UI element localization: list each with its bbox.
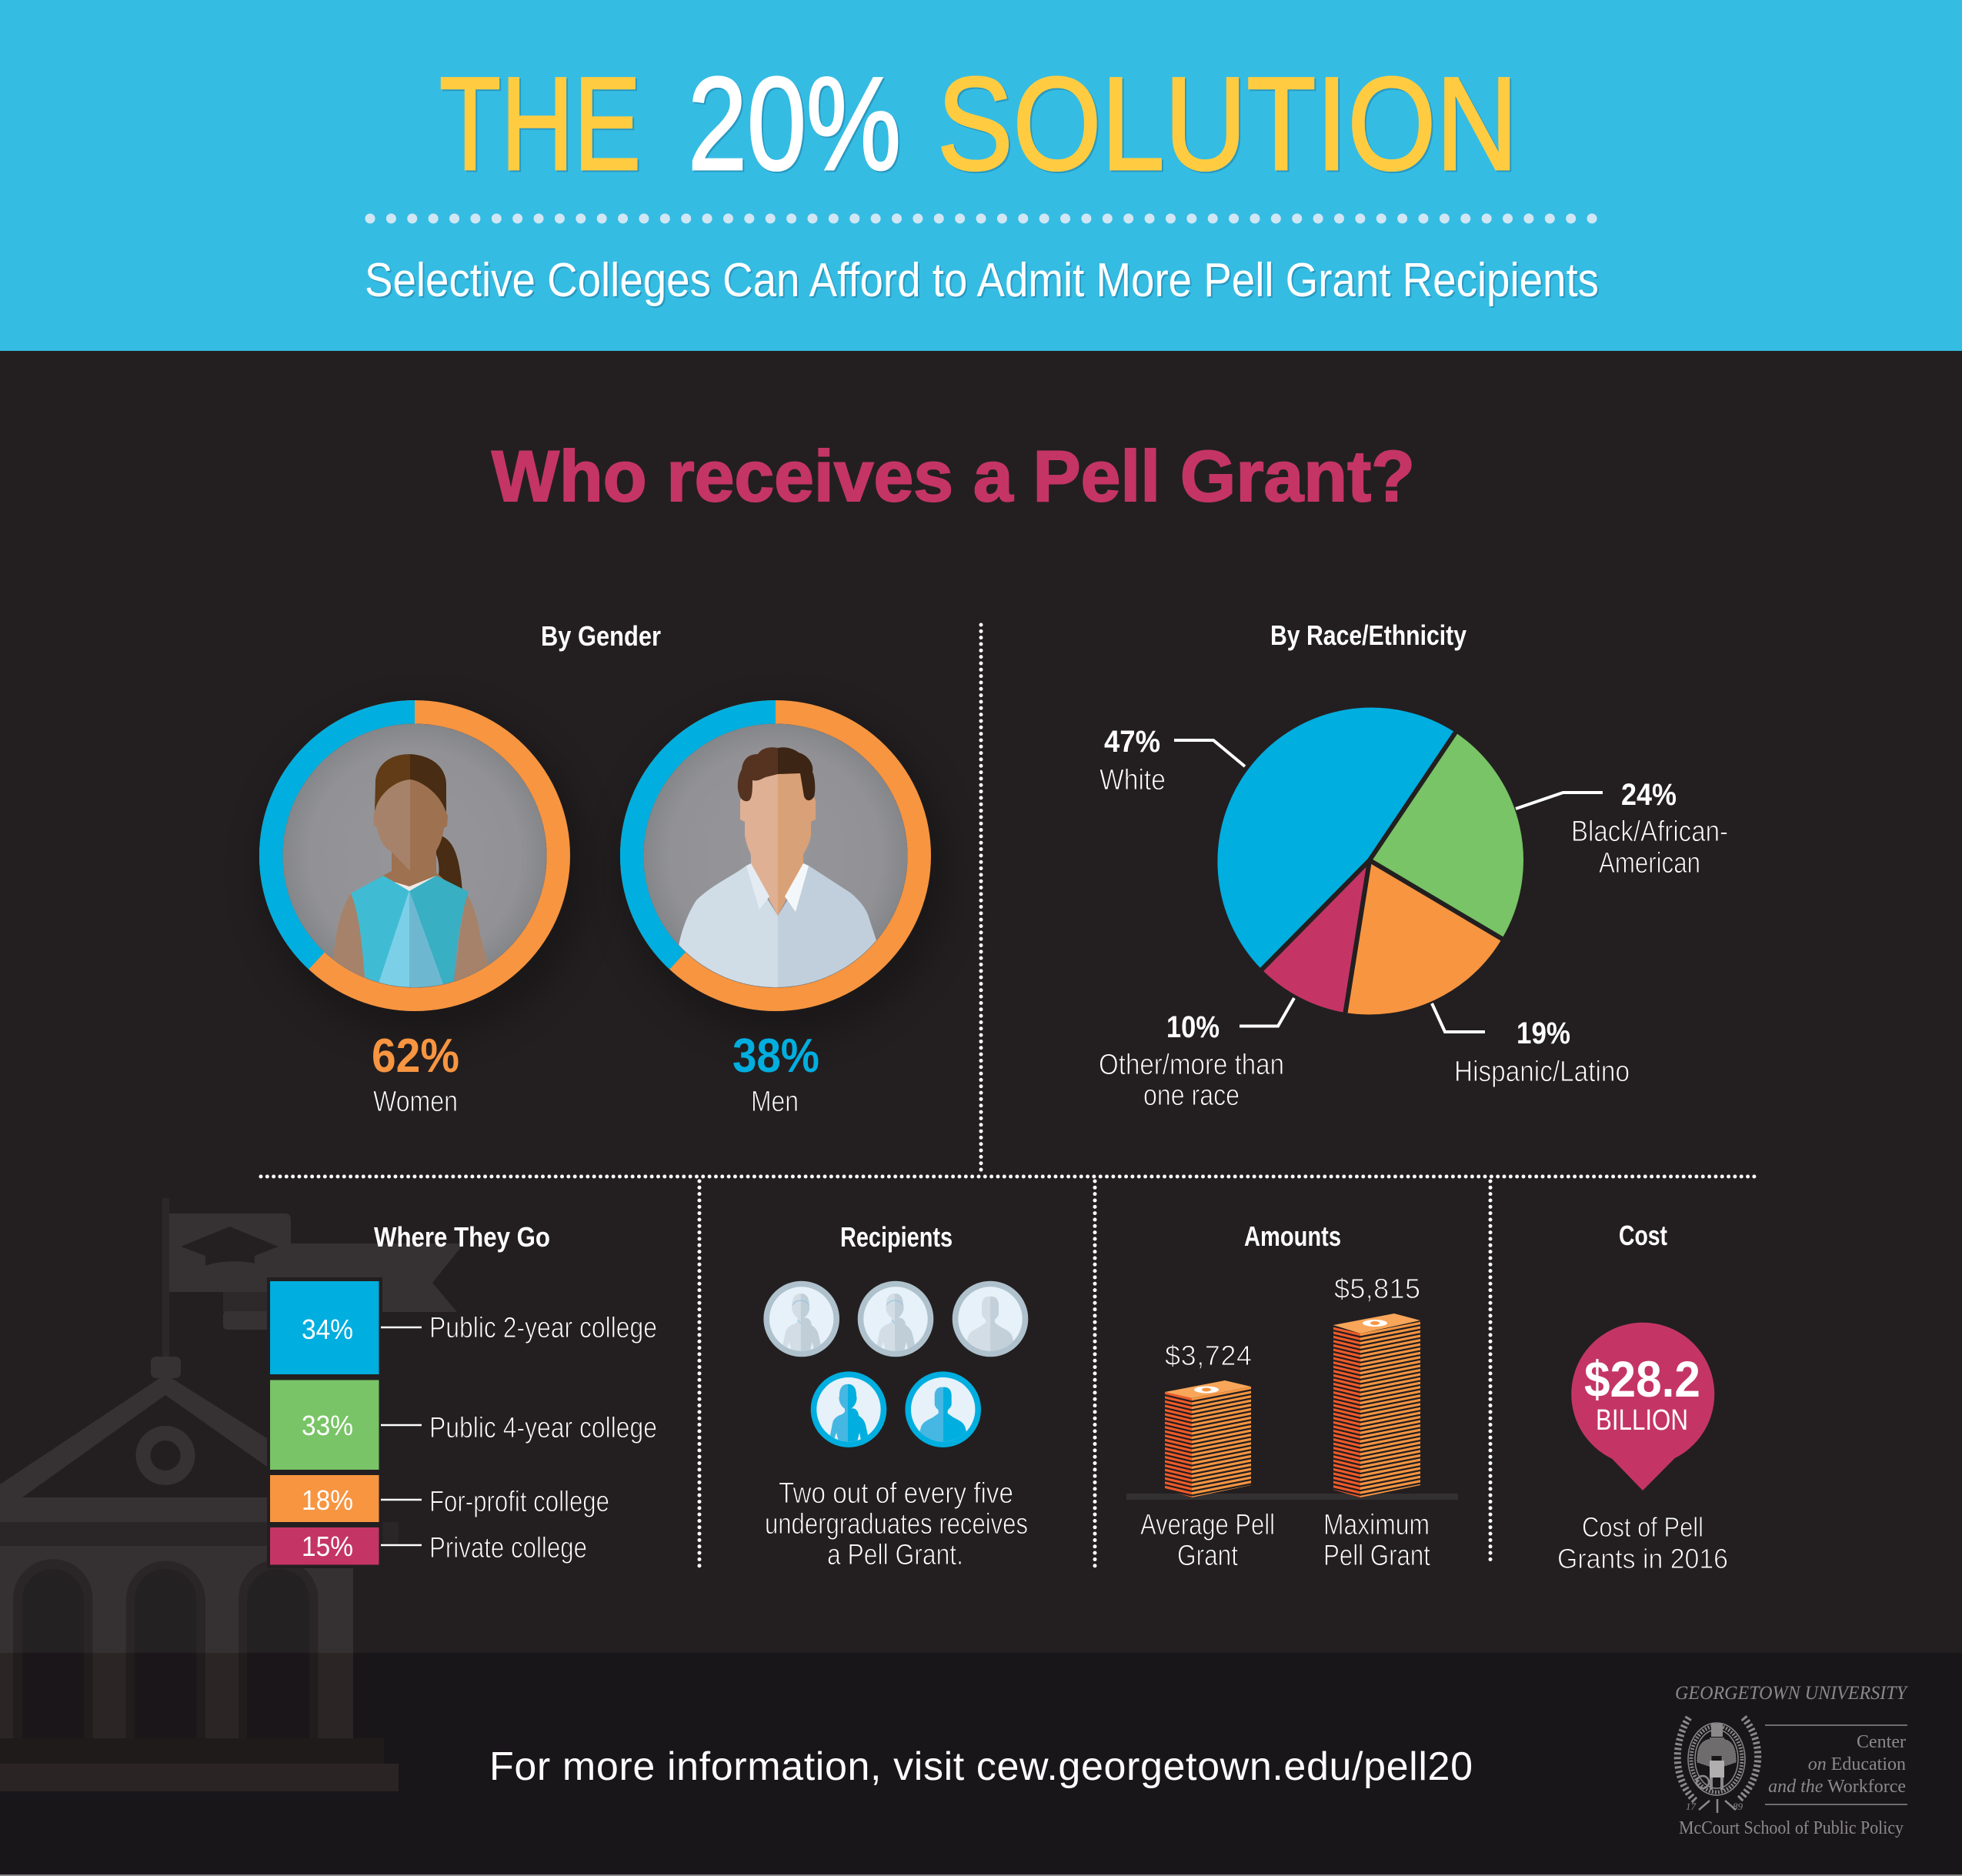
label: black 24% <box>1571 778 1728 880</box>
label: hispanic 19%: 19% <box>1517 1016 1570 1050</box>
label: maximum pell grant <box>1323 1509 1430 1572</box>
icon: person man gray <box>956 1283 1025 1354</box>
center name: Center <box>1857 1732 1906 1752</box>
title: THE <box>439 50 641 198</box>
panel: cost <box>1557 1220 1728 1574</box>
stacked bar: 15% <box>302 1531 353 1562</box>
caption: two out of five: Two out of every five <box>779 1477 1013 1510</box>
stacked bar backing <box>267 1277 382 1568</box>
figure: man <box>677 747 877 993</box>
caption: cost of pell grants: Grants in 2016 <box>1557 1543 1728 1574</box>
pin badge <box>1571 1323 1714 1490</box>
stat: 38% men <box>732 1030 819 1118</box>
money stack: maximum <box>1333 1314 1420 1497</box>
caption: cost of pell grants: Cost of Pell <box>1582 1511 1703 1543</box>
heading: where they go: Where They Go <box>374 1221 550 1253</box>
icon: person woman gray <box>860 1283 931 1354</box>
caption: two out of five <box>765 1477 1028 1571</box>
bar labels: Public 4-year college <box>429 1412 657 1444</box>
title: SOLUTION <box>937 50 1518 198</box>
heading: by race: By Race/Ethnicity <box>1270 619 1466 651</box>
stacked bar: 34% <box>302 1314 353 1345</box>
stat: 62% women <box>372 1030 459 1118</box>
label: white 47%: 47% <box>1104 725 1160 759</box>
label: black 24%: 24% <box>1621 778 1677 812</box>
caption: two out of five: undergraduates receives <box>765 1508 1028 1541</box>
leader lines <box>381 1327 422 1545</box>
bar labels <box>429 1312 657 1564</box>
stacked bar: 18% <box>302 1484 353 1516</box>
label: white 47%: White <box>1099 764 1166 796</box>
pie chart <box>1215 706 1526 1016</box>
stat: 38% men: Men <box>751 1086 799 1118</box>
label: other 10%: 10% <box>1166 1010 1220 1044</box>
icon: person woman gray <box>766 1283 836 1354</box>
panel: amounts <box>1126 1220 1458 1572</box>
stacked bar: 33% <box>302 1410 353 1441</box>
bar labels: For-profit college <box>429 1486 609 1518</box>
label: other 10%: one race <box>1143 1080 1240 1112</box>
stacked bar <box>270 1281 379 1565</box>
caption: two out of five: a Pell Grant. <box>827 1539 963 1571</box>
logo: georgetown <box>1675 1683 1909 1838</box>
donut: men 38% <box>632 712 919 1000</box>
title: 20% <box>688 50 901 198</box>
center name <box>1765 1725 1907 1804</box>
stat: 62% women: Women <box>373 1086 458 1118</box>
figure: woman <box>332 754 489 993</box>
center name: on Education <box>1808 1754 1906 1774</box>
wordmark: GEORGETOWN UNIVERSITY <box>1675 1683 1909 1704</box>
label: other 10%: Other/more than <box>1099 1049 1284 1081</box>
donut: women 62% <box>271 712 559 1000</box>
label: white 47% <box>1099 725 1166 796</box>
seal <box>1677 1717 1758 1813</box>
pin badge: $28.2 <box>1584 1350 1700 1407</box>
stat: 38% men: 38% <box>732 1030 819 1083</box>
dotted dividers <box>261 625 1760 1567</box>
label: black 24%: Black/African- <box>1571 816 1728 848</box>
panel: by gender <box>271 620 919 1118</box>
label: black 24%: American <box>1599 847 1700 880</box>
footer call to action: For more information, visit cew.georgetown.edu/pell20 <box>489 1744 1473 1789</box>
icon: person man blue <box>908 1374 978 1445</box>
seal: 17 <box>1686 1801 1696 1812</box>
panel: by race/ethnicity <box>1099 619 1728 1112</box>
panel: where they go <box>267 1221 657 1568</box>
seal: 89 <box>1733 1801 1743 1812</box>
label: average pell grant <box>1140 1509 1275 1572</box>
label: average pell grant: Average Pell <box>1140 1509 1275 1541</box>
label: hispanic 19%: Hispanic/Latino <box>1454 1056 1630 1088</box>
section heading: Who receives a Pell Grant? <box>492 436 1415 516</box>
pin badge: BILLION <box>1596 1404 1688 1437</box>
money stack: average <box>1165 1380 1251 1497</box>
footer band <box>0 1653 1962 1876</box>
bar labels: Private college <box>429 1532 587 1564</box>
ground shadow <box>1126 1494 1458 1500</box>
center name: and the Workforce <box>1768 1777 1906 1797</box>
icon: person woman blue <box>814 1374 883 1445</box>
heading: by gender: By Gender <box>541 620 661 652</box>
school name: McCourt School of Public Policy <box>1679 1818 1904 1838</box>
heading: cost: Cost <box>1619 1220 1667 1251</box>
leader lines <box>1174 740 1603 1032</box>
dotted rule <box>370 214 1594 223</box>
title <box>439 50 1518 198</box>
label: maximum pell grant: Maximum <box>1323 1509 1430 1541</box>
subtitle: Selective Colleges Can Afford to Admit More Pell Grant Recipients <box>365 254 1599 307</box>
heading: amounts: Amounts <box>1244 1220 1341 1252</box>
header banner <box>0 0 1962 351</box>
stat: 62% women: 62% <box>372 1030 459 1083</box>
panel: recipients <box>765 1221 1028 1571</box>
value: $3,724: $3,724 <box>1165 1340 1252 1371</box>
label: hispanic 19% <box>1454 1016 1630 1088</box>
caption: cost of pell grants <box>1557 1511 1728 1574</box>
value: $5,815: $5,815 <box>1334 1273 1420 1304</box>
label: maximum pell grant: Pell Grant <box>1323 1540 1430 1572</box>
bar labels: Public 2-year college <box>429 1312 657 1344</box>
label: other 10% <box>1099 1010 1284 1112</box>
heading: recipients: Recipients <box>840 1221 953 1253</box>
label: average pell grant: Grant <box>1177 1540 1238 1572</box>
illustration: college building <box>0 1198 464 1653</box>
